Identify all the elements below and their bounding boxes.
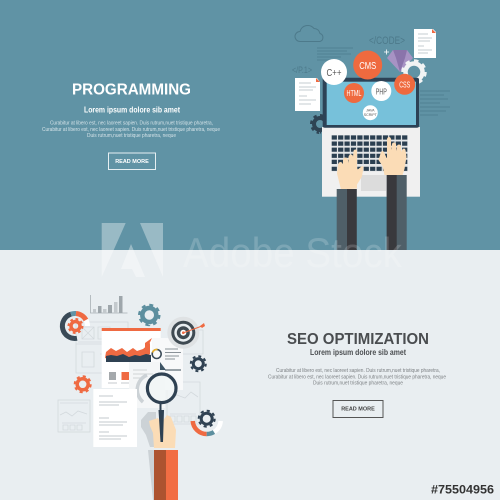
laptop screen [323,78,419,128]
bubble: JavaScript: JAVA [366,108,375,112]
body text: Curabitur at libero est, nec laoreet sapien. Duis rutrum,nuet tristique pharetra, neque [268,374,446,380]
bubble: JavaScript [363,105,378,120]
gear orange [75,376,91,392]
heading: seo optimization: SEO OPTIMIZATION [287,331,429,348]
sleeve shadow [148,450,154,500]
magnifying glass [147,374,176,410]
watermark text: Adobe Stock [183,229,403,276]
bubble: JavaScript: SCRIPT [364,113,378,117]
panel: programming banner [0,0,500,250]
body text: Curabitur at libero est, nec laoreet sapien. Duis rutrum,nuet tristique pharetra, neque [42,127,220,133]
bubble: PHP: PHP [376,86,387,96]
bubble: HTML: HTML [346,89,362,98]
icon: diamond [384,50,413,72]
right sleeve [387,175,407,250]
icon: document left [295,78,320,111]
button: read more [108,153,156,170]
button: read more: READ MORE [115,159,149,165]
panel: seo optimization banner [58,295,446,500]
left sleeve [337,189,357,250]
body text: Curabitur at libero est, nec laoreet sapien. Duis rutrum,nuet tristique pharetra, [276,368,440,374]
laptop base [322,127,420,197]
button: read more [333,400,383,418]
bubble: CMS [353,50,382,80]
magnifier shadow [137,375,147,402]
heading: programming: PROGRAMMING [72,82,191,98]
browser window with chart [102,328,161,388]
button: read more: READ MORE [341,406,375,412]
sleeve [154,450,178,500]
wireframes in background [58,322,203,432]
icon: document top right [414,29,436,58]
subheading: Lorem ipsum dolore sib amet [84,106,180,115]
body text: Duis rutrum,nuet tristique pharetra, neque [313,380,403,386]
gear dark lower right [199,411,215,427]
trackpad [361,175,386,191]
gear orange in donut [68,319,82,333]
body text: Curabitur at libero est, nec laoreet sapien. Duis rutrum,nuet tristique pharetra, [50,120,213,126]
arc chart lower right [193,421,221,434]
code tag label: </CODE> [369,35,405,47]
subheading: Lorem ipsum dolore sib amet [310,348,406,357]
donut top left [62,313,88,338]
bubble: CMS: CMS [359,60,376,72]
bubble: CSS: CSS [399,80,410,90]
icon: white gear [402,60,426,84]
bubble: C++ [321,59,347,85]
bubble: PHP [371,81,391,101]
hand holding magnifier [149,415,176,448]
magnifier handle front [158,410,164,442]
target with arrow [167,317,205,349]
hand shadow [141,412,156,447]
bubble: C++: C++ [326,67,342,79]
icon: dark gear [311,115,329,133]
bubble: HTML [344,83,364,103]
left hand [337,150,364,190]
illustration: seo analysis [58,295,221,500]
right hand [378,137,406,175]
body text: Duis rutrum,nuet tristique pharetra, neque [87,133,176,139]
body text [42,120,220,139]
body text [268,368,446,386]
bubble: CSS [394,74,415,95]
paragraph tag label: </P.1> [292,65,312,75]
watermark logo [102,223,163,277]
report with ring chart [129,338,183,408]
stock id: #75504956 [431,482,494,496]
gear dark [191,356,206,371]
faint code lines [317,48,450,115]
keyboard [332,135,408,172]
illustration: laptop with code [292,25,450,250]
watermark: Adobe Stock [102,223,403,277]
icon: cloud [295,25,323,42]
document sheet [93,389,137,447]
bar chart [90,295,128,313]
gear teal [139,305,159,325]
